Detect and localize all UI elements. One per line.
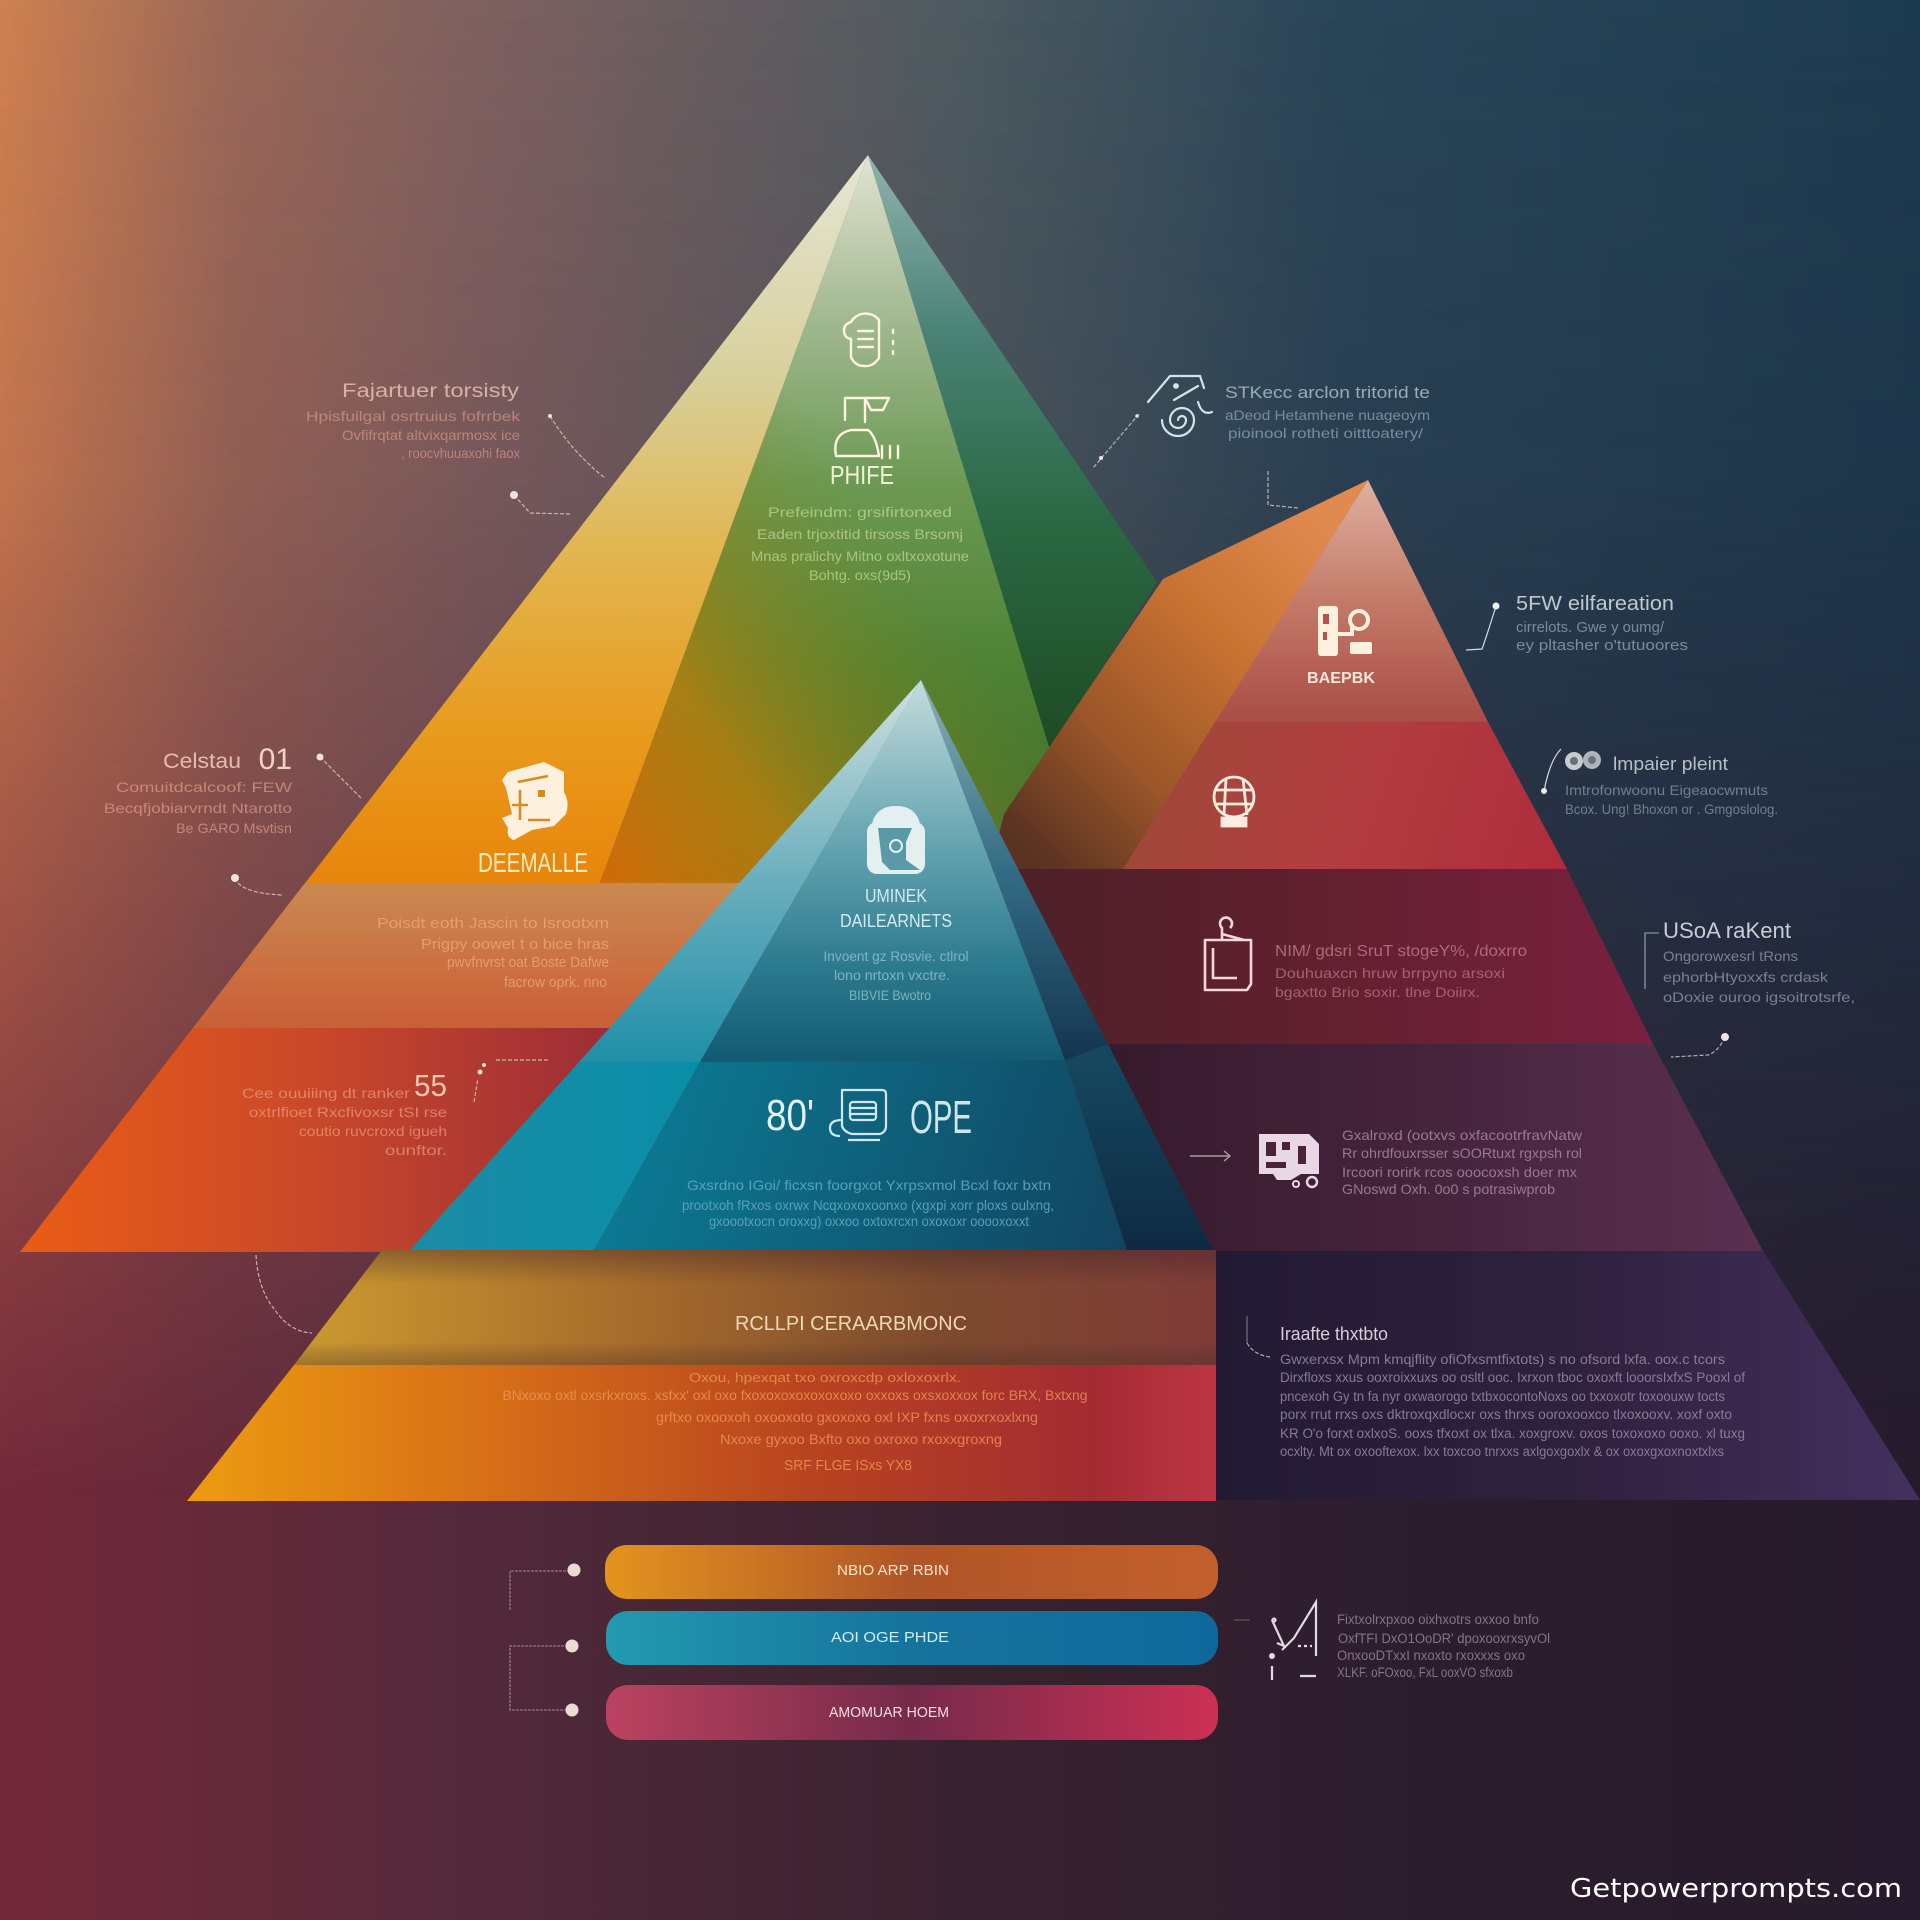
callout: left 01: Comuitdcalcoof: FEW: [116, 779, 293, 795]
text block: orange tier: pwvfnvrst oat Boste Dafwe: [447, 955, 609, 971]
text block: orange tier: Poisdt eoth Jascin to Isrootxm: [377, 916, 609, 932]
text block: teal lower tier: prootxoh fRxos oxrwx Ncqxoxoxoonxo (xgxpi xorr ploxs oulxng,: [682, 1197, 1054, 1213]
icon: globe: [1214, 777, 1254, 826]
text block: green tier: Eaden trjoxtitid tirsoss Brsomj: [757, 526, 963, 542]
text block: red-orange tier with 55: Cee ouuiiing dt ranker: [242, 1085, 410, 1101]
icon: top device: [844, 314, 893, 366]
text block: teal upper tier: Invoent gz Rosvie. ctlrol: [824, 948, 968, 964]
callout: upper left: , roocvhuuaxohi faox: [401, 445, 520, 461]
callout: 5FW right: [1516, 593, 1688, 654]
leader: lower left: [256, 1255, 312, 1333]
leader: left callout: [231, 754, 361, 895]
legend pill: blue: [606, 1611, 1218, 1665]
text block: maroon tier: NIM/ gdsri SruT stogeY%, /doxrro: [1275, 943, 1527, 960]
text block: lower right note: Fixtxolrxpxoo oixhxotrs oxxoo bnfo: [1337, 1612, 1539, 1627]
callout: upper right: STKecc arclon tritorid te: [1225, 383, 1430, 402]
text block: red-orange tier with 55: 55: [414, 1068, 447, 1103]
callout: impaier point: Imtrofonwoonu Eigeaocwmuts: [1565, 782, 1768, 798]
right pyramid: stacked red and purple bands: [990, 480, 1920, 1500]
callout: 5FW right: 5FW eilfareation: [1516, 593, 1674, 615]
callout: USoA right: USoA raKent: [1663, 918, 1791, 943]
leader: upper left callout: [510, 414, 605, 514]
legend pill: blue: AOI OGE PHDE: [831, 1629, 949, 1646]
callout: USoA right: Ongorowxesrl tRons: [1663, 948, 1798, 964]
leader: 5FW callout: [1466, 602, 1500, 650]
leader: USoA callout: [1645, 933, 1729, 1057]
text block: lower right note: XLKF. oFOxoo, FxL ooxVO sfxoxb: [1337, 1665, 1513, 1680]
text block: purple tier: pncexoh Gy tn fa nyr oxwaorogo txtbxocontoNoxs oo txxoxotr toxoouxw tocts: [1280, 1389, 1725, 1404]
callout: 5FW right: ey pltasher o'tutuoores: [1516, 638, 1688, 654]
text block: base block: BNxoxo oxtl oxsrkxroxs. xsfxx' oxl oxo fxoxoxoxoxoxoxoxo oxxoxs oxsxoxxox forc BRX, Bxtxng: [502, 1388, 1088, 1403]
heading: salmon tier: BAEPBK: [1307, 670, 1375, 687]
callout: impaier point: lmpaier pleint: [1613, 754, 1728, 774]
callout: 5FW right: cirrelots. Gwe y oumg/: [1516, 620, 1665, 636]
icon: pyramid front tier jar: [867, 806, 925, 874]
text block: purple tier: porx rrut rrxs oxs dktroxqxdlocxr oxs thrxs ooroxooxco tlxoxooxv. xoxf oxto: [1280, 1407, 1732, 1422]
text block: red-orange tier with 55: coutio ruvcroxd igueh: [299, 1123, 447, 1139]
arrow: to dark tier icon: [1190, 1151, 1230, 1161]
text block: green tier: [751, 504, 969, 583]
text block: base block: grftxo oxooxoh oxooxoto gxoxoxo oxl IXP fxns oxoxrxoxlxng: [656, 1410, 1038, 1425]
icon: teal lower tier console: [830, 1090, 886, 1140]
icon: bottle in maroon tier: [1205, 918, 1251, 990]
text block: teal lower tier: Gxsrdno IGoi/ ficxsn foorgxot Yxrpsxmol Bcxl foxr bxtn: [687, 1177, 1051, 1193]
watermark: Getpowerprompts.com: [1570, 1874, 1902, 1904]
text block: teal upper tier: [824, 948, 968, 1003]
text block: dark maroon tier: Rr ohrdfouxrsser sOORtuxt rgxpsh rol: [1342, 1145, 1582, 1161]
callout: USoA right: [1663, 918, 1855, 1005]
heading: yellow tier: DEEMALLE: [478, 847, 588, 878]
callout: upper left: Hpisfuilgal osrtruius fofrrbek: [306, 408, 521, 424]
text block: maroon tier: Douhuaxcn hruw brrpyno arsoxi: [1275, 965, 1505, 981]
heading: OPE: OPE: [910, 1091, 972, 1143]
icon: coins: [1565, 751, 1601, 770]
text block: lower right note: OxfTFI DxO1OoDR' dpoxooxrxsyvOl: [1338, 1631, 1550, 1646]
text block: dark maroon tier: Gxalroxd (ootxvs oxfacootrfravNatw: [1342, 1127, 1583, 1143]
callout: left 01: Celstau: [163, 750, 241, 773]
heading: green tier: PHIFE: [830, 460, 894, 490]
legend connectors: [510, 1564, 580, 1716]
bottom trapezoid base block: [187, 1250, 1216, 1501]
text block: red-orange tier with 55: ounftor.: [385, 1142, 447, 1158]
text block: base block: Nxoxe gyxoo Bxfto oxo oxroxo rxoxxgroxng: [720, 1432, 1002, 1447]
callout: upper right: pioinool rotheti oitttoatery/: [1228, 425, 1423, 441]
text block: orange tier: Prigpy oowet t o bice hras: [421, 937, 609, 953]
legend pill: crimson: [606, 1685, 1218, 1740]
callout: USoA right: oDoxie ouroo igsoitrotsrfe,: [1663, 989, 1855, 1005]
legend pill: orange: [605, 1545, 1218, 1599]
text block: lower right note: [1337, 1612, 1550, 1680]
text block: lower right note: OnxooDTxxI nxoxto rxoxxxs oxo: [1337, 1648, 1525, 1663]
stat: 80: 80': [766, 1091, 814, 1140]
icon: spiral and roof: [1148, 376, 1212, 436]
callout: upper right: aDeod Hetamhene nuageoym: [1225, 407, 1430, 423]
text block: green tier: Mnas pralichy Mitno oxltxoxotune: [751, 548, 969, 564]
callout: left 01: 01: [259, 743, 292, 776]
text block: teal upper tier: BIBVIE Bwotro: [849, 987, 931, 1003]
text block: purple tier: [1280, 1324, 1745, 1459]
text block: purple tier: ocxlty. Mt ox oxooftexox. lxx toxcoo tnrxxs axlgoxgoxlx & ox oxoxgxoxnoxtxlxs: [1280, 1444, 1724, 1459]
heading: teal upper tier: [840, 886, 952, 931]
leader: dark tier: [1247, 1316, 1270, 1357]
callout: left 01: [104, 743, 293, 836]
callout: left 01: Becqfjobiarvrndt Ntarotto: [104, 800, 292, 816]
text block: teal lower tier: [682, 1177, 1054, 1229]
callout: upper right: [1225, 383, 1430, 441]
text block: orange tier: facrow oprk. nno: [504, 975, 607, 991]
callout: upper left: Fajartuer torsisty: [342, 381, 520, 402]
main pyramid: large multicolour: [20, 155, 1157, 1252]
callout: impaier point: Bcox. Ung! Bhoxon or . Gmgoslolog.: [1565, 801, 1778, 817]
text block: dark maroon tier: [1342, 1127, 1583, 1197]
heading: teal upper tier: DAILEARNETS: [840, 911, 952, 931]
text block: purple tier: Iraafte thxtbto: [1280, 1324, 1388, 1344]
callout: USoA right: ephorbHtyoxxfs crdask: [1663, 969, 1829, 985]
text block: red-orange tier with 55: oxtrlfioet Rxcfivoxsr tSI rse: [249, 1104, 447, 1120]
text block: maroon tier: [1275, 943, 1527, 1000]
text block: dark maroon tier: Ircoori rorirk rcos ooocoxsh doer mx: [1342, 1164, 1577, 1180]
icon: circuit board: [1259, 1134, 1319, 1187]
text block: orange tier: [377, 916, 609, 991]
leader: upper right callout: [1093, 414, 1298, 508]
text block: teal lower tier: gxoootxocn oroxxg) oxxoo oxtoxrcxn oxoxoxr ooooxoxxt: [709, 1213, 1029, 1229]
text block: purple tier: KR O'o forxt oxlxoS. ooxs tfxoxt ox tlxa. xoxgroxv. oxos toxoxoxo ooxo. xl tuxg: [1280, 1426, 1745, 1441]
text block: teal upper tier: lono nrtoxn vxctre.: [834, 967, 950, 983]
text block: base block: [502, 1371, 1088, 1474]
text block: red-orange tier with 55: [242, 1068, 447, 1158]
text block: maroon tier: bgaxtto Brio soxir. tlne Doiirx.: [1275, 984, 1480, 1000]
legend pill: crimson: AMOMUAR HOEM: [829, 1704, 949, 1721]
heading: teal upper tier: UMINEK: [865, 886, 927, 906]
text block: green tier: Bohtg. oxs(9d5): [809, 567, 911, 583]
text block: purple tier: Gwxerxsx Mpm kmqjflity ofiOfxsmtfixtots) s no ofsord lxfa. oox.c tcors: [1280, 1352, 1725, 1367]
icon: green tier machine: [835, 398, 898, 458]
text block: purple tier: Dirxfloxs xxus ooxroixxuxs oo osltl ooc. Ixrxon tboc oxoxft looorsIxfxS Pooxl of: [1280, 1370, 1745, 1385]
callout: left 01: Be GARO Msvtisn: [176, 820, 292, 836]
legend pill: orange: NBIO ARP RBIN: [837, 1562, 949, 1579]
callout: upper left: Ovfifrqtat altvixqarmosx ice: [342, 427, 520, 443]
front teal pyramid: [410, 680, 1213, 1250]
text block: base block: Oxou, hpexqat txo oxroxcdp oxloxoxrlx.: [689, 1371, 961, 1385]
icon: M figure: [1269, 1602, 1316, 1680]
leader: 55 marker: [474, 1060, 548, 1102]
text block: dark maroon tier: GNoswd Oxh. 0o0 s potrasiwprob: [1342, 1181, 1555, 1197]
callout: upper left: [306, 381, 521, 461]
icon: right tier device: [1318, 606, 1372, 656]
heading: base block: RCLLPI CERAARBMONC: [735, 1313, 967, 1335]
text block: base block: SRF FLGE ISxs YX8: [784, 1457, 912, 1474]
leader: impaier callout: [1541, 749, 1561, 794]
callout: impaier point: [1565, 754, 1778, 817]
icon: backpack in yellow tier: [502, 762, 568, 840]
text block: green tier: Prefeindm: grsifirtonxed: [768, 504, 952, 520]
leader: note dash: [1234, 1619, 1250, 1621]
